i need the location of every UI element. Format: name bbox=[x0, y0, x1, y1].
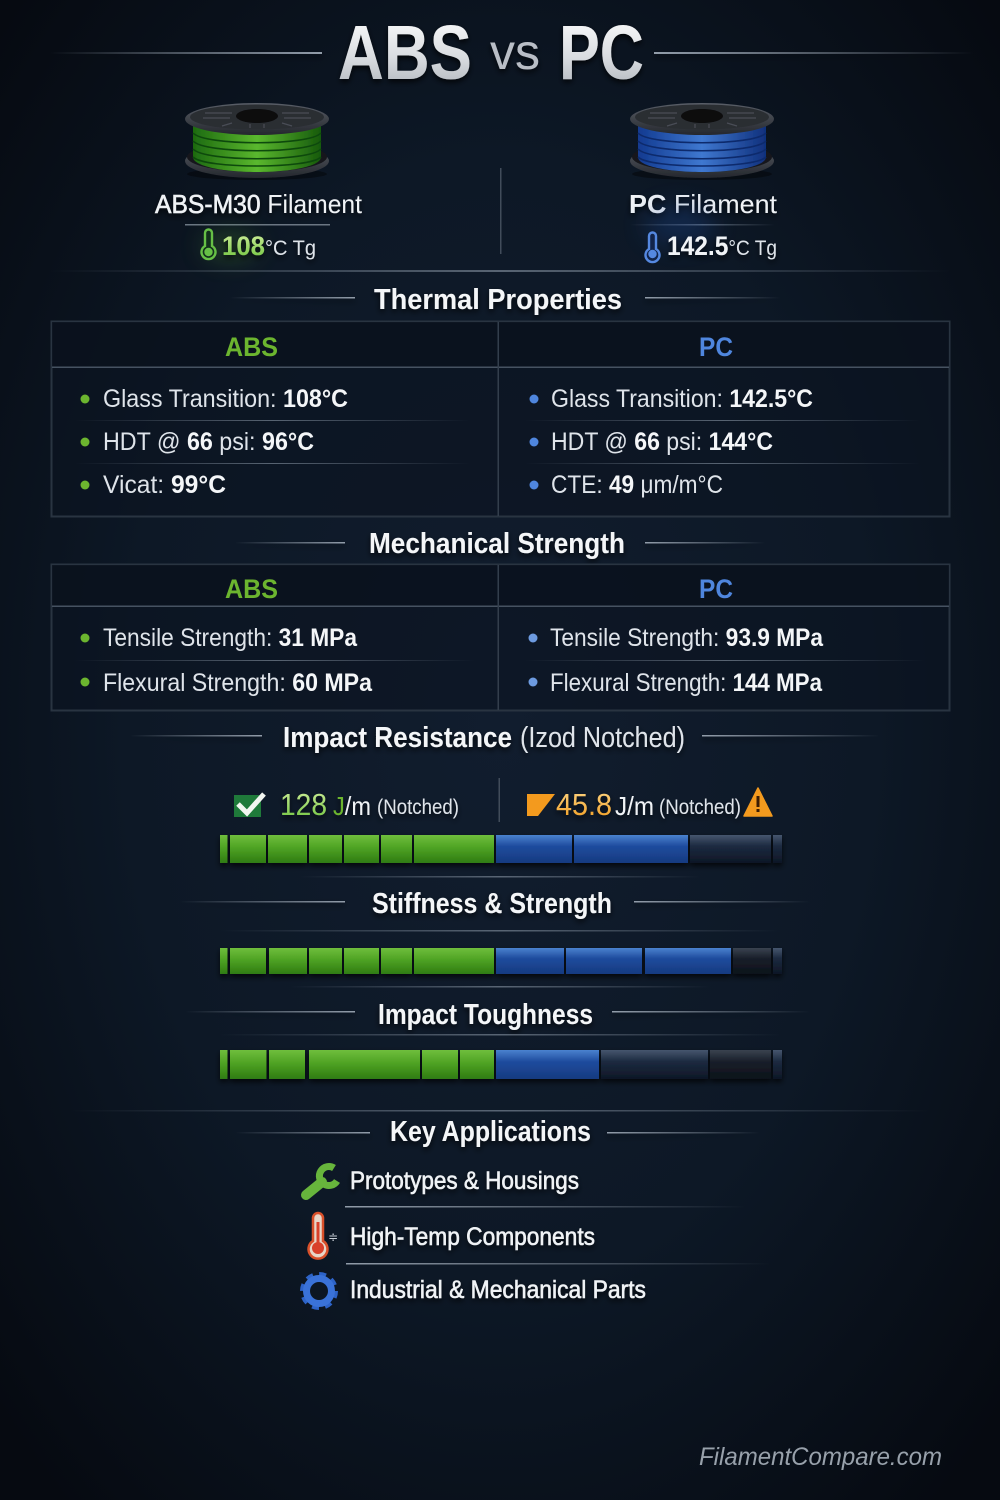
PC thermal bullet list bbox=[530, 385, 813, 499]
application: Prototypes & Housings: Prototypes & Housings bbox=[350, 1167, 579, 1195]
ABS column header: ABS bbox=[225, 332, 278, 362]
ABS impact value: J/m bbox=[333, 791, 371, 821]
heading: Key Applications: Key Applications bbox=[390, 1116, 591, 1148]
ABS thermal bullet list: Glass Transition: 108°C bbox=[103, 385, 348, 413]
header divider bbox=[500, 168, 502, 254]
PC glass transition value: 142.5°C Tg bbox=[667, 231, 777, 261]
panel: mechanical strength bbox=[52, 564, 950, 710]
icon: red thermometer bbox=[308, 1213, 338, 1259]
heading: Impact Resistance: Impact Resistance bbox=[283, 722, 512, 754]
PC strength bullet list: Flexural Strength: 144 MPa bbox=[550, 669, 823, 697]
ABS column header: ABS bbox=[225, 574, 278, 604]
heading: Mechanical Strength: Mechanical Strength bbox=[369, 528, 625, 560]
PC impact value bbox=[556, 787, 741, 822]
ABS glass transition value: 108°C Tg bbox=[222, 231, 316, 261]
ABS strength bullet list bbox=[80, 624, 373, 697]
PC impact value: 45.8 bbox=[556, 787, 612, 822]
heading: Impact Toughness: Impact Toughness bbox=[378, 999, 593, 1031]
PC strength bullet list bbox=[528, 624, 824, 697]
ABS impact value: (Notched) bbox=[377, 796, 459, 819]
PC filament name: PC Filament bbox=[629, 189, 778, 219]
ABS impact value bbox=[280, 787, 459, 822]
ABS thermal bullet list bbox=[80, 385, 348, 499]
PC thermal bullet list: Glass Transition: 142.5°C bbox=[551, 385, 813, 413]
ABS thermal bullet list: HDT @ 66 psi: 96°C bbox=[103, 428, 314, 456]
watermark: FilamentCompare.com bbox=[699, 1443, 942, 1471]
title: PC bbox=[559, 10, 644, 96]
icon: ABS green filament spool bbox=[185, 103, 329, 180]
ABS strength bullet list: Flexural Strength: 60 MPa bbox=[103, 669, 373, 697]
ABS impact value: 128 bbox=[280, 787, 327, 822]
icon: orange flag bbox=[527, 794, 555, 816]
bar: stiffness comparison bbox=[220, 948, 782, 974]
heading: Impact Resistance: (Izod Notched) bbox=[520, 722, 685, 754]
heading: Stiffness & Strength: Stiffness & Strength bbox=[372, 888, 612, 920]
divider: impact values bbox=[498, 778, 500, 822]
title: vs bbox=[490, 24, 540, 80]
PC column header: PC bbox=[699, 574, 733, 604]
ABS filament name: ABS-M30 Filament bbox=[155, 189, 363, 219]
icon: blue gear bbox=[303, 1275, 335, 1307]
icon: green thermometer bbox=[202, 230, 258, 260]
application: Industrial & Mechanical Parts: Industrial & Mechanical Parts bbox=[350, 1276, 646, 1304]
panel: thermal properties bbox=[52, 322, 950, 516]
icon: warning triangle bbox=[744, 788, 772, 816]
PC column header: PC bbox=[699, 332, 733, 362]
icon: blue thermometer bbox=[644, 205, 716, 262]
PC thermal bullet list: CTE: 49 μm/m°C bbox=[551, 471, 723, 499]
PC impact value: J/m bbox=[615, 791, 654, 821]
icon: check mark bbox=[234, 794, 264, 817]
bar: toughness comparison bbox=[220, 1050, 782, 1079]
icon: PC blue filament spool bbox=[630, 103, 774, 180]
bar: impact resistance comparison bbox=[220, 835, 782, 863]
heading: Impact Resistance bbox=[130, 722, 880, 754]
PC thermal bullet list: HDT @ 66 psi: 144°C bbox=[551, 428, 773, 456]
icon: wrench bbox=[306, 1167, 337, 1195]
heading: Thermal Properties: Thermal Properties bbox=[374, 284, 622, 316]
application: High-Temp Components: High-Temp Components bbox=[350, 1223, 595, 1251]
PC strength bullet list: Tensile Strength: 93.9 MPa bbox=[550, 624, 824, 652]
title: ABS bbox=[338, 10, 472, 96]
ABS strength bullet list: Tensile Strength: 31 MPa bbox=[103, 624, 358, 652]
icon: red thermometer: ≑ bbox=[328, 1230, 338, 1244]
title bbox=[50, 10, 974, 96]
ABS thermal bullet list: Vicat: 99°C bbox=[103, 471, 226, 499]
PC impact value: (Notched) bbox=[659, 796, 741, 819]
